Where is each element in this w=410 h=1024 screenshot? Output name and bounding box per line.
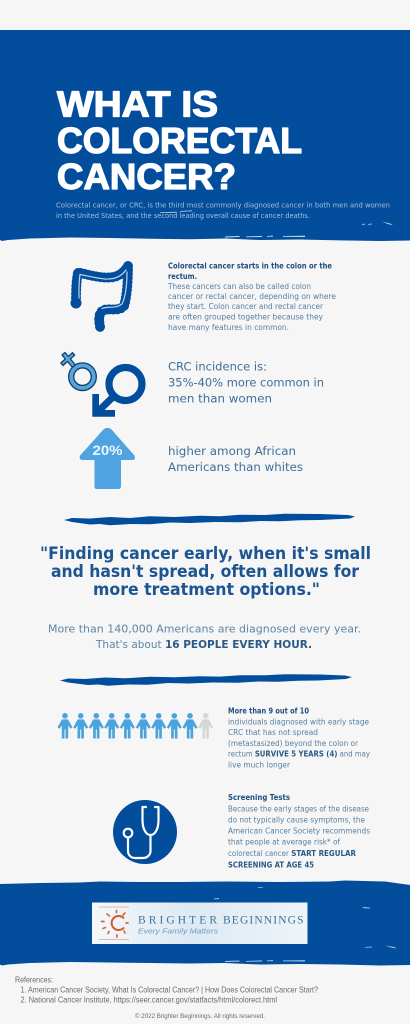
text: colon description: rectum. bbox=[168, 272, 197, 281]
references: 2. National Cancer Institute, https://seer.cancer.gov/statfacts/html/colorect.html bbox=[20, 996, 277, 1004]
text: colon description: have many features in common. bbox=[168, 323, 289, 332]
divider: brush stroke bbox=[64, 514, 355, 525]
text: colon description: are often grouped together because they bbox=[168, 312, 323, 322]
logo: Every Family Matters bbox=[138, 926, 218, 936]
text: screening tests: that people at average risk* of bbox=[228, 838, 340, 846]
intro text bbox=[56, 200, 390, 220]
quote: more treatment options." bbox=[93, 580, 320, 599]
text: screening tests: colorectal cancer START REGULAR bbox=[228, 849, 356, 858]
text: colon description: cancer or rectal cancer, depending on where bbox=[168, 292, 336, 301]
title: WHAT IS bbox=[57, 84, 218, 124]
quote bbox=[40, 544, 371, 599]
intro text: in the United States, and the second leading overall cause of cancer deaths. bbox=[56, 211, 310, 220]
logo: BEGINNINGS bbox=[223, 914, 304, 926]
copyright: © 2022 Brighter Beginnings. All rights reserved. bbox=[135, 1012, 265, 1020]
intro text: Colorectal cancer, or CRC, is the third most commonly diagnosed cancer in both men and women bbox=[56, 200, 390, 210]
quote: "Finding cancer early, when it's small bbox=[40, 544, 371, 563]
text: incidence: CRC incidence is: bbox=[168, 360, 267, 374]
text: African Americans bbox=[168, 444, 303, 474]
text: screening tests: Screening Tests bbox=[228, 793, 290, 802]
references: 1. American Cancer Society, What Is Colorectal Cancer? | How Does Colorectal Cancer Start? bbox=[20, 986, 318, 994]
title: CANCER? bbox=[57, 156, 236, 197]
references bbox=[15, 976, 318, 1004]
divider: brush stroke bbox=[60, 674, 352, 686]
text: screening tests: do not typically cause symptoms, the bbox=[228, 816, 365, 824]
title bbox=[57, 84, 302, 197]
statistic text bbox=[48, 622, 361, 651]
statistic text: That's about 16 PEOPLE EVERY HOUR. bbox=[95, 638, 312, 651]
text: survival bbox=[228, 706, 370, 770]
quote: and hasn't spread, often allows for bbox=[51, 562, 360, 581]
text: survival: (metastasized) beyond the colon or bbox=[228, 739, 359, 748]
icon: female symbol bbox=[61, 352, 94, 388]
icon: ten people pictogram bbox=[58, 713, 213, 738]
icon: up arrow 20%: 20% bbox=[92, 442, 123, 458]
panel: header bbox=[0, 30, 410, 241]
text: colon description: These cancers can also be called colon bbox=[167, 282, 311, 291]
text: screening tests: SCREENING AT AGE 45 bbox=[228, 860, 314, 870]
text: colon description: Colorectal cancer starts in the colon or the bbox=[168, 262, 332, 270]
text: survival: CRC that has not spread bbox=[228, 728, 318, 737]
icon: stethoscope bbox=[113, 800, 177, 864]
text: incidence: men than women bbox=[168, 392, 272, 406]
panel: footer band bbox=[0, 880, 410, 966]
logo bbox=[92, 902, 308, 944]
text: colon description: they start. Colon cancer and rectal cancer bbox=[168, 302, 324, 311]
logo: BRIGHTER bbox=[138, 914, 217, 926]
icon: colon bbox=[70, 266, 128, 329]
text: African Americans: Americans than whites bbox=[168, 460, 303, 474]
statistic text: More than 140,000 Americans are diagnosed every year. bbox=[48, 622, 361, 636]
title: COLORECTAL bbox=[57, 120, 302, 161]
text: screening tests: Because the early stages of the disease bbox=[228, 804, 369, 814]
icon: up arrow 20% bbox=[80, 428, 135, 489]
text: survival: individuals diagnosed with early stage bbox=[228, 718, 369, 726]
text: incidence: 35%-40% more common in bbox=[168, 376, 324, 390]
text: survival: More than 9 out of 10 bbox=[228, 706, 309, 716]
text: incidence bbox=[168, 360, 324, 406]
text: screening tests: American Cancer Society recommends bbox=[228, 826, 370, 836]
text: survival: rectum SURVIVE 5 YEARS (4) and may bbox=[228, 750, 370, 758]
text: survival: live much longer bbox=[228, 760, 291, 770]
text: African Americans: higher among African bbox=[168, 444, 296, 458]
text: screening tests bbox=[228, 793, 370, 870]
references: References: bbox=[15, 976, 53, 984]
icon: male symbol bbox=[92, 368, 142, 417]
text: colon description bbox=[167, 262, 336, 332]
